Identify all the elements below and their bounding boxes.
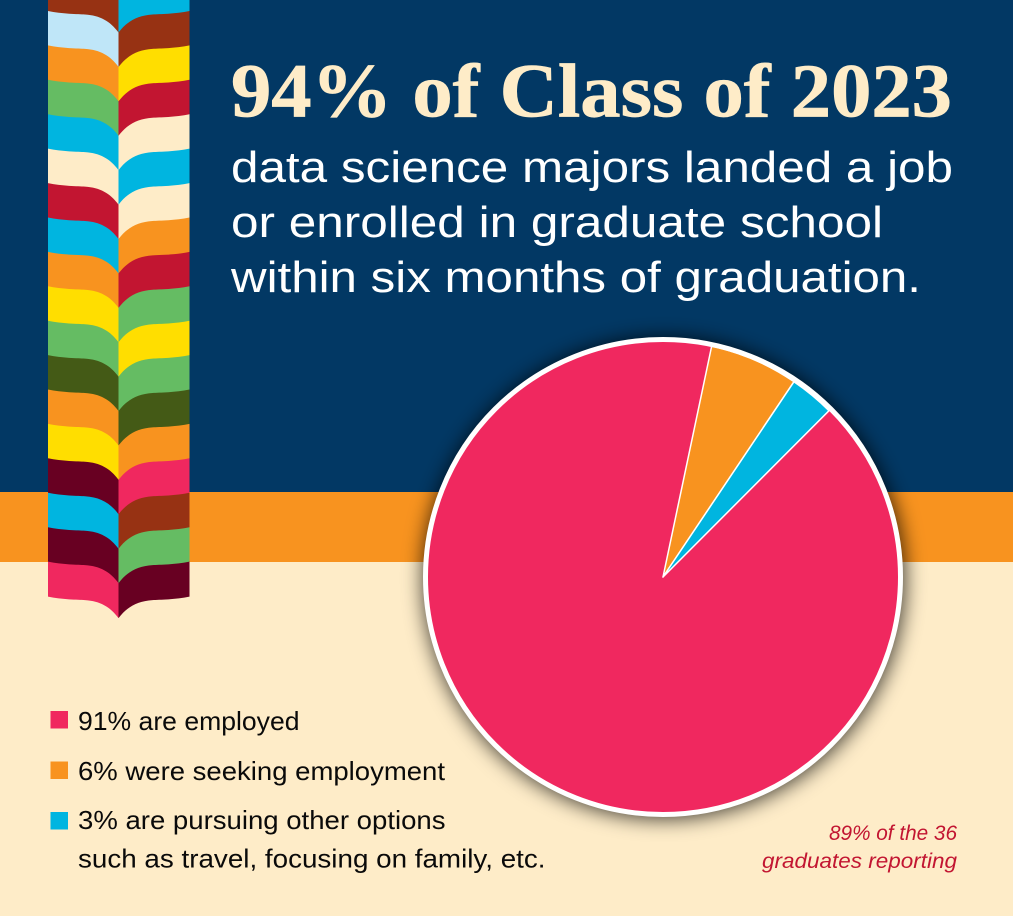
legend bbox=[50, 706, 546, 874]
decorative ribbon bbox=[48, 0, 190, 618]
legend item: other options: 3% are pursuing other options bbox=[78, 805, 446, 835]
legend item: other options: such as travel, focusing on family, etc. bbox=[78, 844, 546, 874]
legend item: seeking employment: 6% were seeking employment bbox=[78, 756, 446, 786]
footnote: graduates reporting bbox=[762, 822, 957, 873]
slice: 3% other options bbox=[663, 382, 829, 577]
background: cream bottom section bbox=[0, 562, 1013, 916]
subtitle text: or enrolled in graduate school bbox=[231, 198, 883, 247]
background: navy top section bbox=[0, 0, 1013, 492]
subtitle text: data science majors landed a job bbox=[231, 143, 953, 192]
footnote: graduates reporting: 89% of the 36 bbox=[829, 822, 957, 845]
legend item: other options bbox=[50, 805, 546, 874]
pie chart bbox=[423, 337, 905, 819]
subtitle text: within six months of graduation. bbox=[230, 253, 921, 302]
footnote: graduates reporting: graduates reporting bbox=[762, 850, 957, 873]
slice: 6% seeking employment bbox=[663, 346, 794, 577]
slice: 91% employed bbox=[426, 340, 900, 814]
title: 94% of Class of 2023 bbox=[231, 50, 952, 134]
legend item: employed: 91% are employed bbox=[78, 706, 300, 736]
subtitle text bbox=[230, 143, 953, 302]
background: orange band bbox=[0, 492, 1013, 562]
